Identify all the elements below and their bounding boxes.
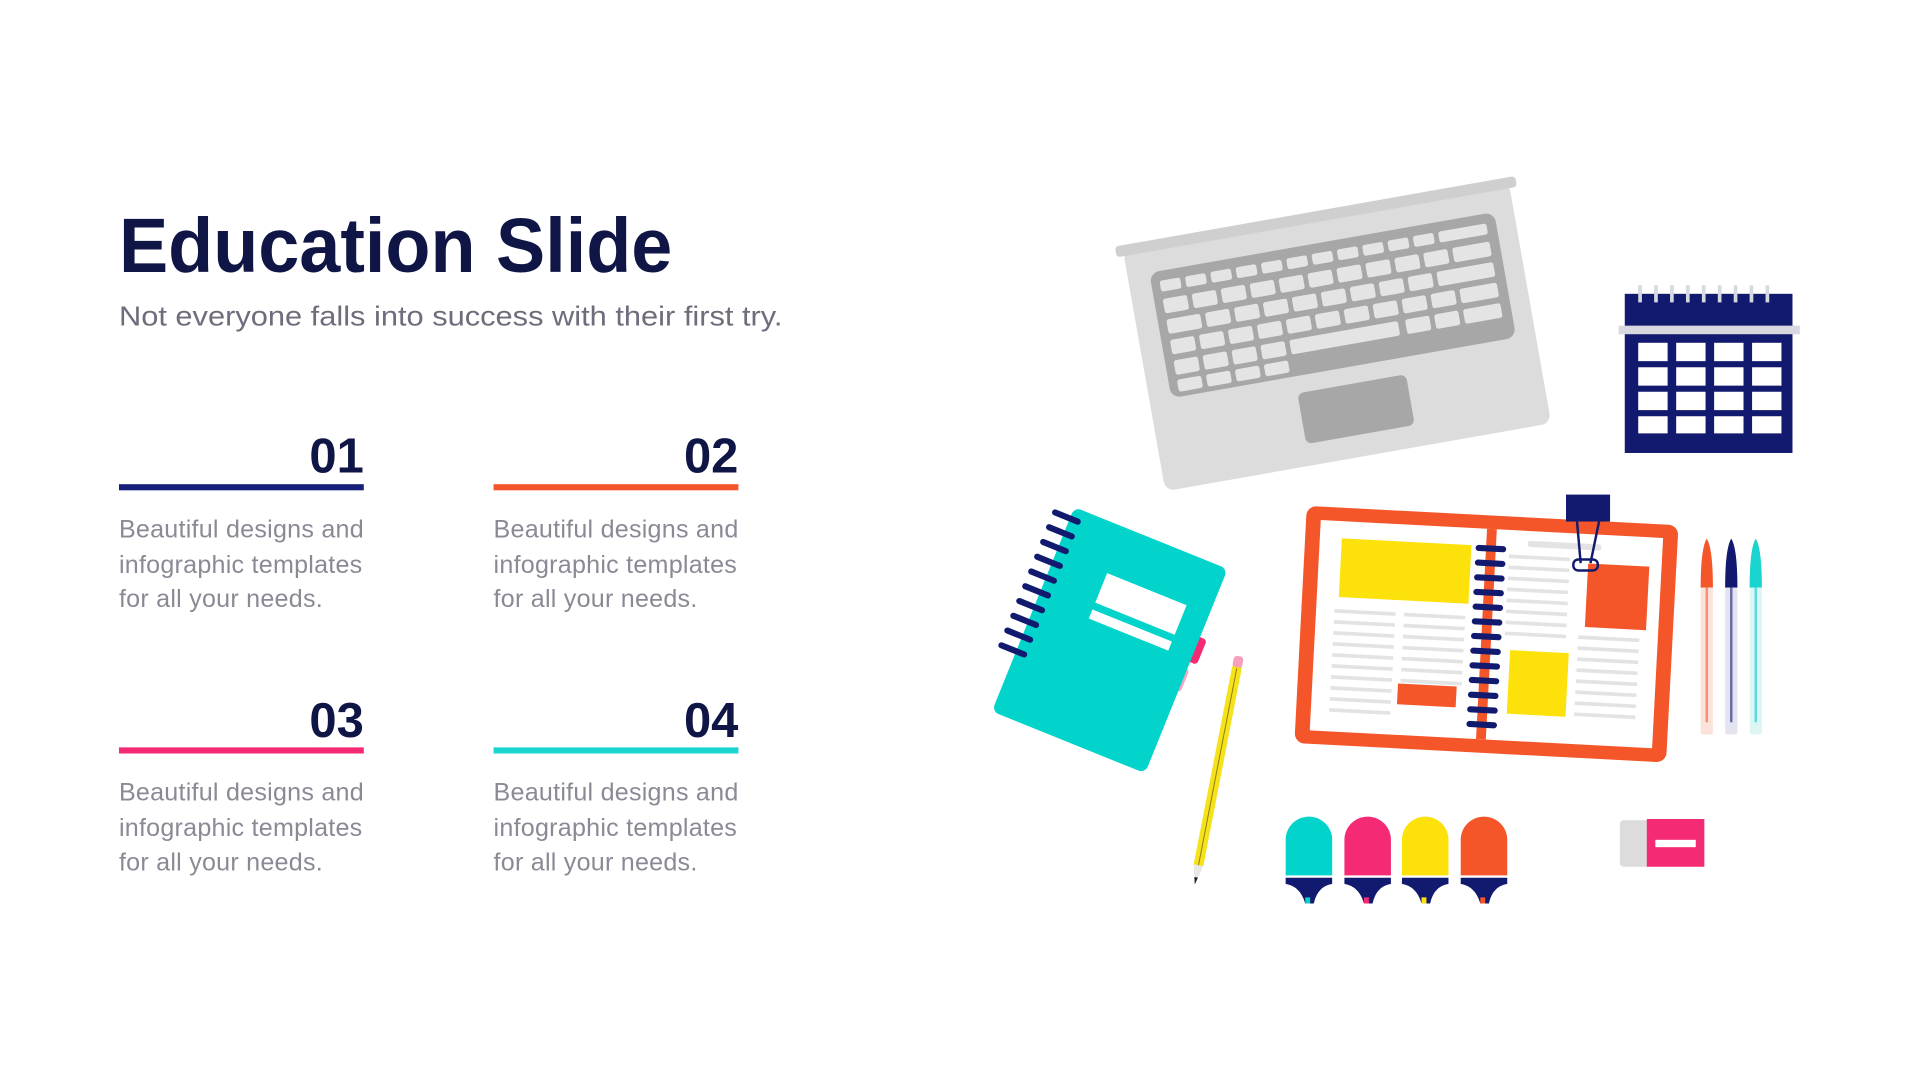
icon: binder clip [1566,495,1610,570]
item 03: Beautiful designs and [119,779,364,807]
item 02: 02 [684,430,738,484]
icon: pens [1701,539,1762,735]
item 01: 01 [309,430,364,484]
title: Education Slide [119,203,672,289]
icon: planner [1294,506,1678,762]
icon: notebook [977,501,1234,776]
icon: highlighters [1286,817,1507,903]
item 02: for all your needs. [494,585,698,613]
item 01: Beautiful designs and [119,515,364,543]
icon: calendar [1619,285,1800,453]
item 02: Beautiful designs and [494,515,739,543]
subtitle: Not everyone falls into success with their first try. [119,301,782,332]
item 04 [494,694,739,876]
item 04: Beautiful designs and [494,779,739,807]
icon: eraser [1620,819,1704,867]
item 03: for all your needs. [119,848,323,876]
icon: pencil [1190,655,1244,885]
item 04: infographic templates [494,814,737,842]
item 03: infographic templates [119,814,362,842]
item 04: 04 [684,694,738,748]
item 01: for all your needs. [119,585,323,613]
item 03: 03 [309,694,364,748]
item 01 [119,430,364,613]
item 03 [119,694,364,876]
item 04: for all your needs. [494,848,698,876]
item 02 [494,430,739,613]
item 02: infographic templates [494,551,737,579]
icon: laptop [1115,176,1558,493]
item 01: infographic templates [119,551,362,579]
